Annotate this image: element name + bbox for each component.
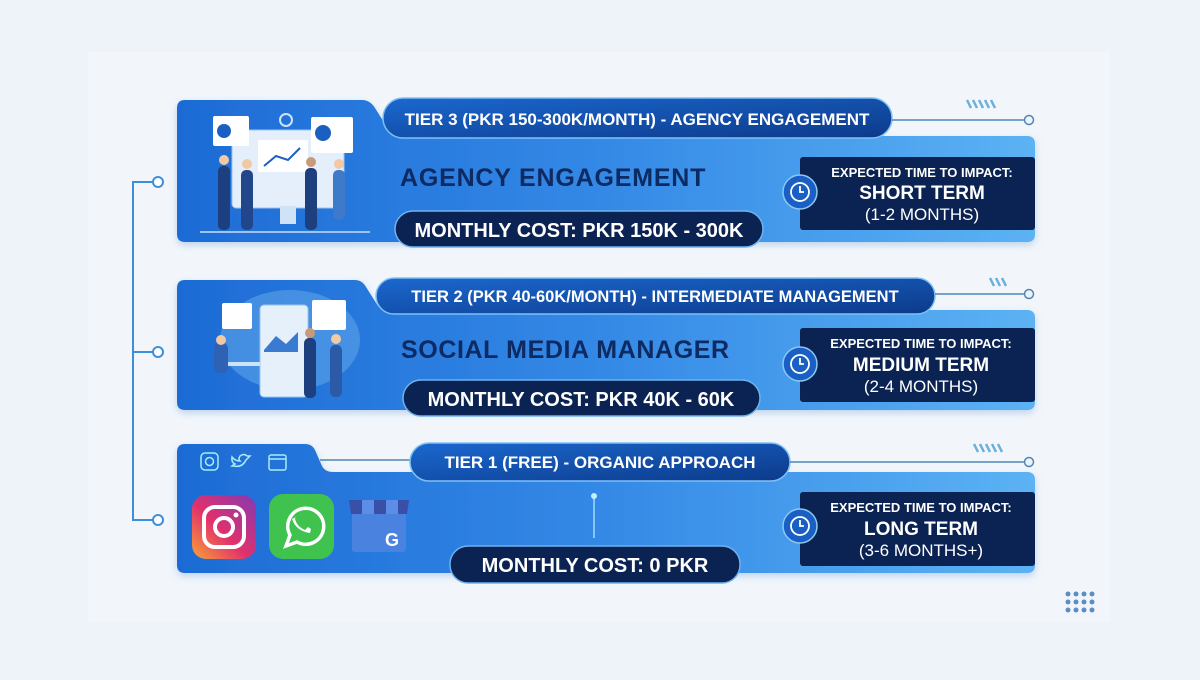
- tier 2 impact box: [800, 328, 1035, 402]
- tier 1 impact box: [800, 492, 1035, 566]
- tier 1 label pill: [410, 443, 790, 481]
- tier 3 impact box: EXPECTED TIME TO IMPACT:: [831, 165, 1013, 180]
- tier 2 cost pill: [403, 380, 760, 416]
- tier 1 impact box: EXPECTED TIME TO IMPACT:: [830, 500, 1012, 515]
- tier 1 label pill: TIER 1 (FREE) - ORGANIC APPROACH: [444, 453, 756, 472]
- illustration: social media manager: [214, 290, 360, 398]
- tier 1 cost pill: MONTHLY COST: 0 PKR: [482, 555, 709, 577]
- connector: left bracket: [133, 177, 163, 525]
- tier 3 impact box: (1-2 MONTHS): [865, 205, 979, 224]
- tier 1 cost pill: [450, 546, 740, 583]
- tier 1 connector line: [591, 444, 1034, 538]
- small social icons: [201, 453, 286, 470]
- tier 3 impact box: [800, 157, 1035, 230]
- icon: clock: [783, 509, 817, 543]
- tier 3 cost pill: MONTHLY COST: PKR 150K - 300K: [415, 220, 744, 242]
- icon: whatsapp: [269, 494, 334, 559]
- panel: tier 2: [177, 278, 1035, 416]
- icon: clock: [783, 347, 817, 381]
- icon: google business: G: [385, 530, 399, 550]
- icon: instagram: [192, 495, 256, 559]
- tier 3 label pill: TIER 3 (PKR 150-300K/MONTH) - AGENCY ENGAGEMENT: [405, 110, 870, 129]
- tier 2 connector line: [935, 278, 1034, 298]
- tier 2 impact box: MEDIUM TERM: [853, 355, 989, 376]
- decorative dots: [1066, 592, 1094, 612]
- icon: google business: [349, 500, 409, 552]
- tier 2 cost pill: MONTHLY COST: PKR 40K - 60K: [428, 389, 735, 411]
- tier 1 impact box: LONG TERM: [864, 519, 978, 540]
- tier 2 label pill: [376, 278, 935, 314]
- tier 2 label pill: TIER 2 (PKR 40-60K/MONTH) - INTERMEDIATE MANAGEMENT: [411, 288, 899, 306]
- tier 2 impact box: (2-4 MONTHS): [864, 377, 978, 396]
- tier 3 cost pill: [395, 211, 763, 247]
- tier 3 label pill: [383, 98, 892, 138]
- tier 2 heading: SOCIAL MEDIA MANAGER: [401, 336, 730, 364]
- tier 3 impact box: SHORT TERM: [859, 183, 985, 204]
- panel: tier 1: [177, 443, 1035, 583]
- tier 2 impact box: EXPECTED TIME TO IMPACT:: [830, 336, 1012, 351]
- tier 3 heading: AGENCY ENGAGEMENT: [400, 164, 706, 192]
- tier 3 connector line: [892, 100, 1034, 124]
- icon: clock: [783, 175, 817, 209]
- tier 1 impact box: (3-6 MONTHS+): [859, 541, 983, 560]
- panel: tier 3: [177, 98, 1035, 247]
- background panel: [88, 52, 1110, 622]
- illustration: agency team: [200, 114, 370, 233]
